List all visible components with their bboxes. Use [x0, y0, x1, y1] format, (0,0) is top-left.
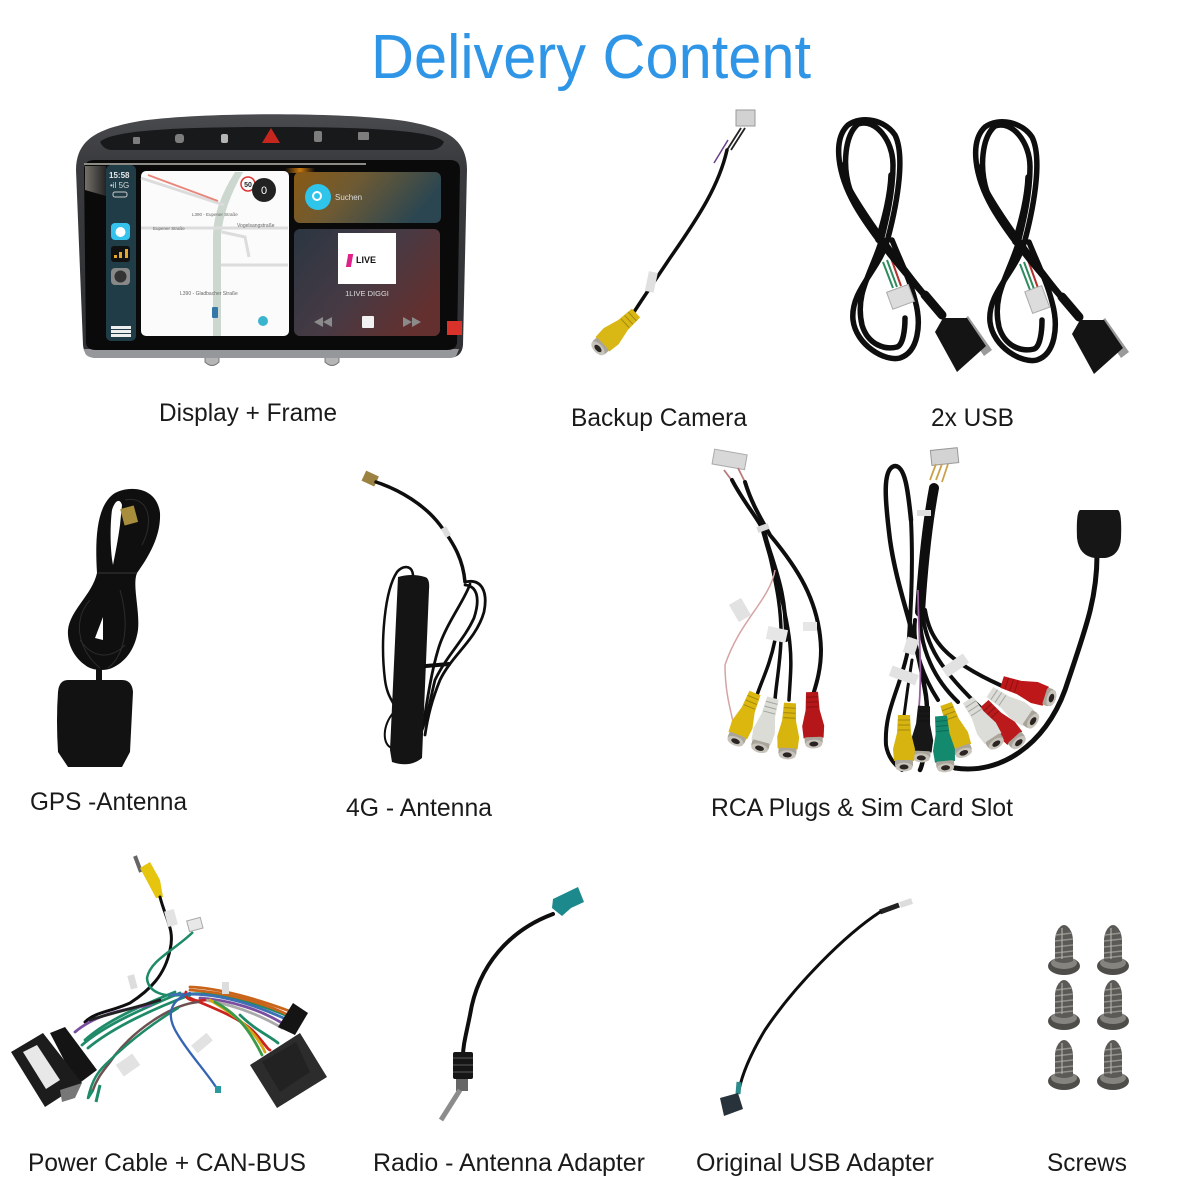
label: Radio Antenna Adapter: Radio - Antenna Adapter: [373, 1149, 645, 1177]
label: 4G Antenna: 4G - Antenna: [346, 794, 492, 822]
map card: [141, 171, 289, 336]
map card: 0: [261, 185, 267, 197]
display bezel frame: [76, 114, 467, 366]
USB cable one: [839, 120, 992, 372]
power cable and CAN-BUS harness: [11, 856, 327, 1108]
radio antenna adapter: [441, 887, 584, 1120]
label: Screws: Screws: [1047, 1149, 1127, 1177]
search card: [285, 168, 441, 223]
media card: LIVE: [356, 255, 376, 265]
label: Power Cable + CAN-BUS: Power Cable + CAN-BUS: [28, 1149, 306, 1177]
media card: [294, 229, 440, 336]
map card: Vogelsangstraße: [237, 223, 275, 229]
4G antenna: [362, 471, 485, 764]
label: Display + Frame: Display + Frame: [159, 399, 337, 427]
label: Original USB Adapter: Original USB Adapter: [696, 1149, 934, 1177]
title: Delivery Content: [371, 23, 811, 92]
icon: hazard button: [262, 128, 280, 143]
label: 2x USB: 2x USB: [931, 404, 1014, 432]
RCA plugs harness: [712, 449, 825, 760]
SIM card and RCA harness: [886, 448, 1121, 773]
red corner tag: [447, 321, 462, 335]
original USB adapter: [720, 901, 912, 1116]
backup camera cable: [587, 110, 755, 360]
side bar: [106, 165, 136, 341]
map card: L390 - Eupener Straße: [192, 212, 238, 217]
map card: Eupener Straße: [153, 226, 185, 231]
USB cable two: [976, 122, 1129, 374]
map card: 50: [244, 182, 252, 189]
label: Backup Camera: Backup Camera: [571, 404, 747, 432]
search card: Suchen: [335, 193, 362, 202]
label: GPS Antenna: GPS -Antenna: [30, 788, 187, 816]
media card: 1LIVE DIGGI: [345, 289, 389, 298]
panel: display and frame: [76, 114, 467, 366]
dashboard buttons: [133, 131, 369, 144]
screws: [1048, 925, 1129, 1090]
side bar: 15:58: [109, 171, 130, 180]
map card: L390 - Gladbacher Straße: [180, 291, 238, 297]
label: RCA Plugs and Sim Card Slot: RCA Plugs & Sim Card Slot: [711, 794, 1013, 822]
GPS antenna: [57, 489, 160, 767]
side bar: •il 5G: [110, 181, 129, 190]
